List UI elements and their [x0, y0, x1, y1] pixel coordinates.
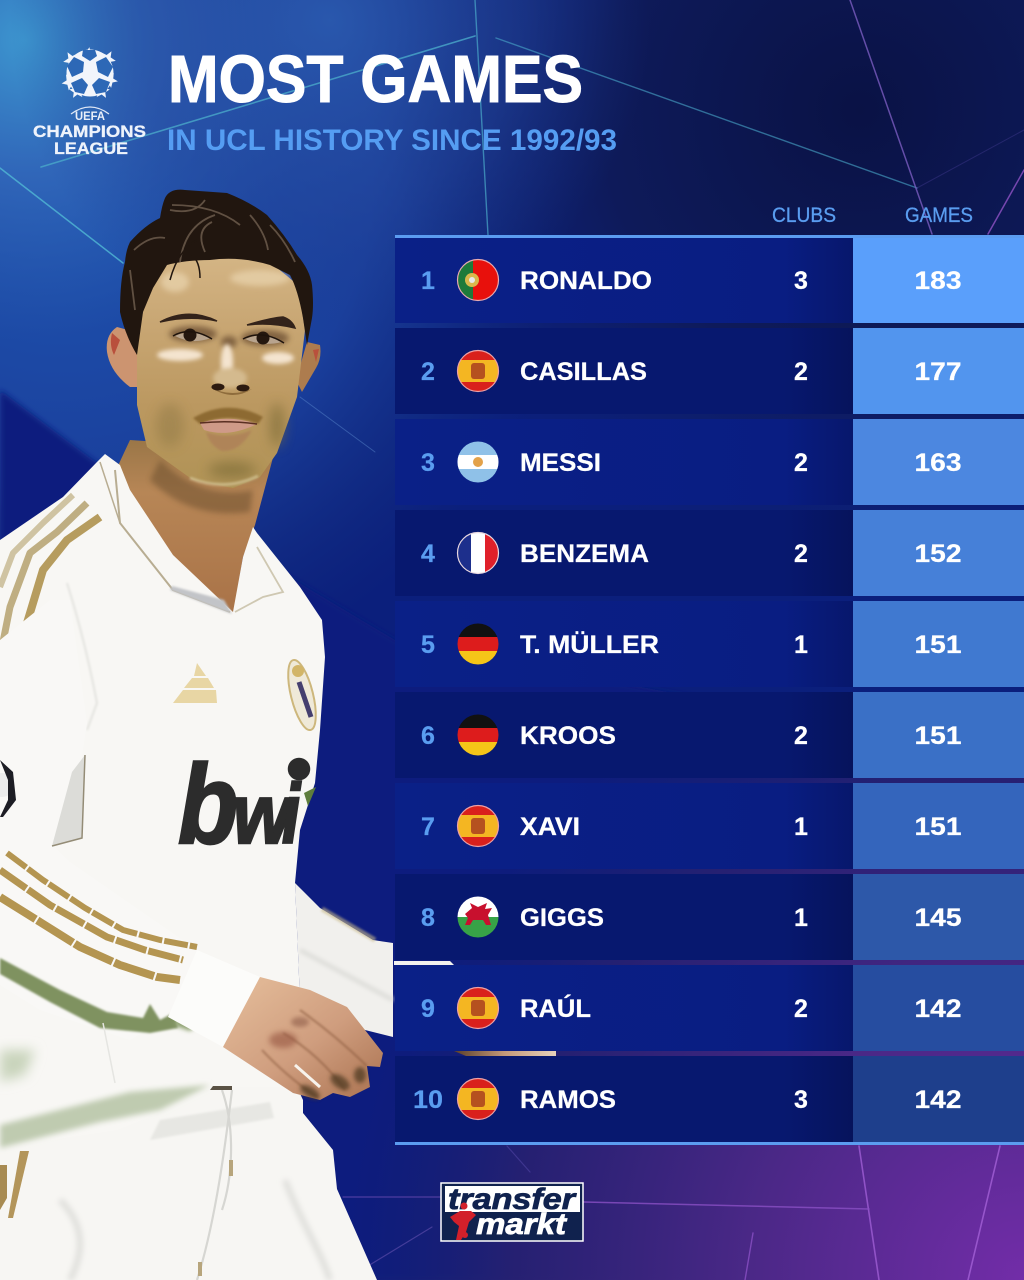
row 4 Benzema: 2: [794, 540, 808, 568]
player ears: [107, 327, 320, 392]
player hand: [223, 977, 383, 1102]
table top rule: [395, 235, 1024, 238]
row 6 Kroos: 151: [914, 722, 962, 750]
row 3 Messi: 163: [914, 449, 962, 477]
mesh side panel: [52, 755, 85, 846]
player near arm: [0, 600, 260, 1148]
title: MOST GAMES: [168, 42, 583, 117]
waistband belt: [210, 1086, 232, 1090]
player face: [137, 255, 305, 488]
row 8 Giggs: GIGGS: [520, 904, 604, 932]
row 2 Casillas: CASILLAS: [520, 358, 647, 386]
row 3 Messi: 2: [794, 449, 808, 477]
row 7 Xavi: XAVI: [520, 813, 580, 841]
row 6 Kroos: 6: [421, 722, 435, 750]
logo: UEFA Champions League: LEAGUE: [54, 140, 128, 158]
arm Champions League patch: [0, 760, 16, 817]
jaw light edge: [190, 476, 258, 485]
bwin sponsor: b: [178, 742, 238, 867]
eyebrows: [160, 314, 295, 328]
row 9 Raúl: RAÚL: [520, 993, 591, 1023]
row 4 Benzema: [395, 510, 1024, 596]
row 2 Casillas: 2: [421, 358, 435, 386]
row 7 Xavi: [395, 783, 1024, 869]
row 1 Ronaldo: 183: [914, 267, 962, 295]
neck shadow: [150, 460, 253, 513]
flag: Spain: [456, 349, 500, 393]
row 3 Messi: [395, 419, 1024, 505]
player far sleeve: [295, 883, 393, 1037]
face highlights: [157, 344, 294, 380]
photo sliver between rows 8 and 9: [394, 961, 454, 965]
row 8 Giggs: [395, 874, 1024, 960]
eyes: [173, 328, 284, 344]
flag: Portugal: [456, 258, 500, 302]
row 10 Ramos: 10: [413, 1086, 443, 1114]
row 4 Benzema: 152: [914, 540, 962, 568]
flag: Germany: [458, 624, 498, 664]
row 3 Messi: MESSI: [520, 449, 601, 477]
row 6 Kroos: 2: [794, 722, 808, 750]
bwin sponsor: [178, 758, 310, 846]
row 10 Ramos: RAMOS: [520, 1086, 616, 1114]
row 1 Ronaldo: 1: [421, 267, 435, 295]
row 8 Giggs: 145: [914, 904, 962, 932]
arm green shading: [0, 958, 178, 1033]
player hair: [120, 190, 313, 355]
bwin sponsor: i: [282, 767, 301, 861]
player shorts: [0, 1072, 377, 1280]
row 9 Raúl: 9: [421, 995, 435, 1023]
mouth: [193, 408, 263, 451]
table header: games: GAMES: [905, 204, 973, 227]
logo: UEFA Champions League: CHAMPIONS: [33, 123, 146, 141]
row 4 Benzema: 4: [421, 540, 435, 568]
row 8 Giggs: 1: [794, 904, 808, 932]
adidas logo: [173, 663, 217, 703]
row 10 Ramos: 142: [914, 1086, 962, 1114]
row 5 T. Müller: [395, 601, 1024, 687]
nose: [210, 368, 252, 395]
sleeve cuff: [168, 950, 260, 1047]
flag: Wales: [458, 896, 498, 938]
bwin sponsor: w: [233, 767, 295, 861]
row 2 Casillas: 2: [794, 358, 808, 386]
row 5 T. Müller: T. MÜLLER: [520, 630, 659, 659]
row 5 T. Müller: 5: [421, 631, 435, 659]
flag: Germany: [458, 714, 498, 756]
logo: Transfermarkt: [441, 1183, 583, 1241]
eye shadows: [169, 326, 289, 348]
row 1 Ronaldo: [395, 238, 1024, 323]
logo: Transfermarkt: transfer: [448, 1183, 578, 1216]
subtitle: IN UCL HISTORY SINCE 1992/93: [167, 124, 617, 157]
icon: starball: [60, 46, 119, 102]
flag: Spain: [456, 986, 500, 1030]
row 9 Raúl: 142: [914, 995, 962, 1023]
shirt shoulder stripes: [0, 495, 100, 728]
row 1 Ronaldo: RONALDO: [520, 267, 652, 295]
photo sliver between rows 9 and 10: [454, 1051, 556, 1056]
stubble: [156, 403, 284, 478]
row 6 Kroos: KROOS: [520, 722, 616, 750]
row 6 Kroos: [395, 692, 1024, 778]
icon: red player figure: [450, 1202, 476, 1240]
flag: Argentina: [458, 442, 498, 482]
row 7 Xavi: 1: [794, 813, 808, 841]
row 2 Casillas: [395, 328, 1024, 414]
flag: France: [456, 531, 500, 575]
row 3 Messi: 3: [421, 449, 435, 477]
row 8 Giggs: 8: [421, 904, 435, 932]
player shirt: [0, 454, 325, 1148]
row 9 Raúl: [395, 965, 1024, 1051]
club crest: [283, 657, 321, 733]
flag: Spain: [456, 804, 500, 848]
table bottom rule: [395, 1142, 1024, 1145]
row 7 Xavi: 7: [421, 813, 435, 841]
player neck: [116, 440, 275, 615]
player photo: [0, 190, 393, 1280]
row 5 T. Müller: 151: [914, 631, 962, 659]
row 10 Ramos: 3: [794, 1086, 808, 1114]
row 10 Ramos: [395, 1056, 1024, 1142]
row 9 Raúl: 2: [794, 995, 808, 1023]
table header: clubs: CLUBS: [772, 204, 836, 227]
flag: Spain: [456, 1077, 500, 1121]
logo: UEFA Champions League: [33, 46, 146, 158]
row 5 T. Müller: 1: [794, 631, 808, 659]
row 2 Casillas: 177: [914, 358, 962, 386]
logo: UEFA Champions League: UEFA: [75, 109, 105, 123]
logo: Transfermarkt: markt: [476, 1208, 568, 1241]
row 1 Ronaldo: 3: [794, 267, 808, 295]
arm stripes: [0, 853, 197, 980]
row 7 Xavi: 151: [914, 813, 962, 841]
row 4 Benzema: BENZEMA: [520, 540, 649, 568]
